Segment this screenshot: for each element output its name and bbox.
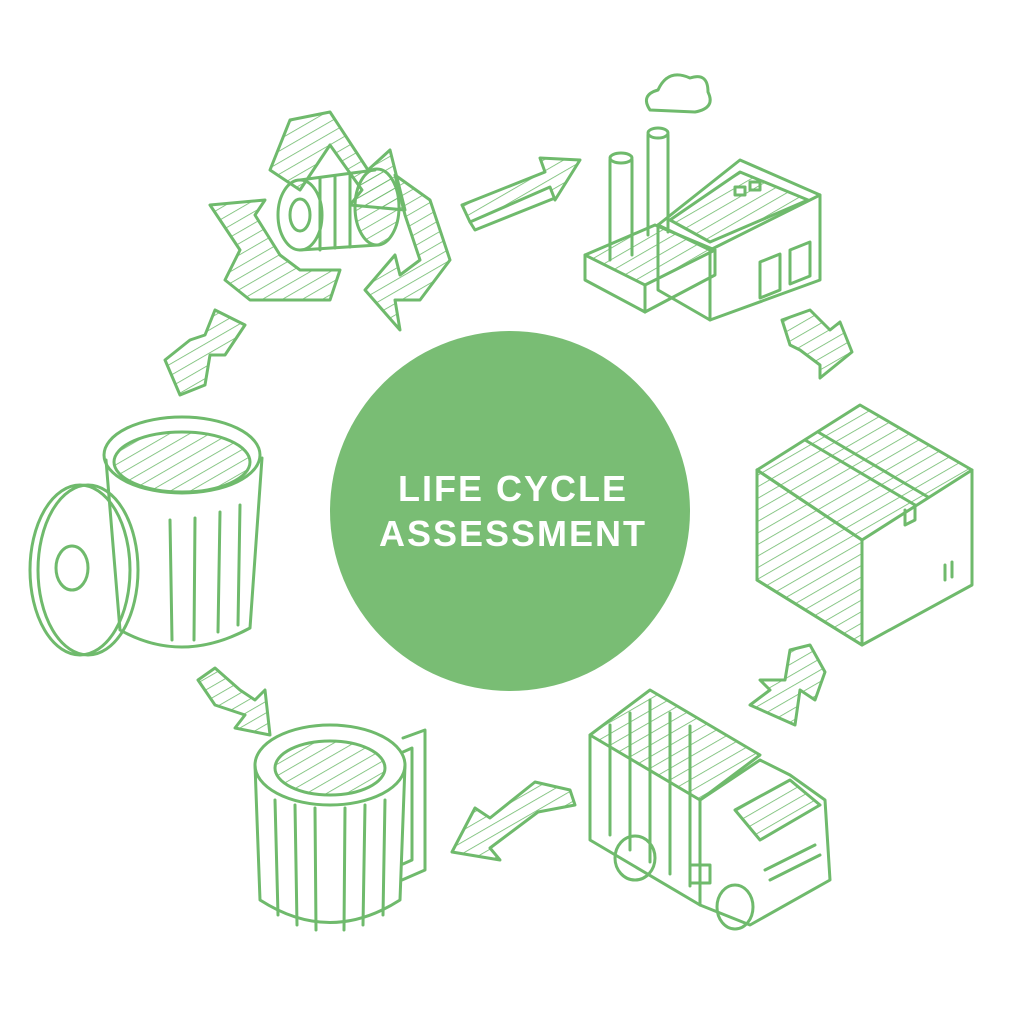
arrow: truck to mug <box>452 782 575 860</box>
arrow: box to truck <box>750 645 825 725</box>
arrow: factory to box <box>782 310 852 378</box>
arrow: recycle to factory <box>462 158 580 230</box>
icon: trash can with lid <box>30 417 262 655</box>
icon: mug <box>255 725 425 930</box>
center circle with title <box>330 331 690 691</box>
icon: recycling symbol with roll <box>210 112 450 330</box>
icon: factory <box>585 75 820 320</box>
icon: cardboard box <box>757 405 972 645</box>
arrow: trash to recycle <box>165 310 245 395</box>
subtitle: ASSESSMENT <box>379 513 647 554</box>
arrow: mug to trash <box>198 668 270 735</box>
title: LIFE CYCLE <box>398 468 628 509</box>
icon: truck <box>590 690 830 929</box>
